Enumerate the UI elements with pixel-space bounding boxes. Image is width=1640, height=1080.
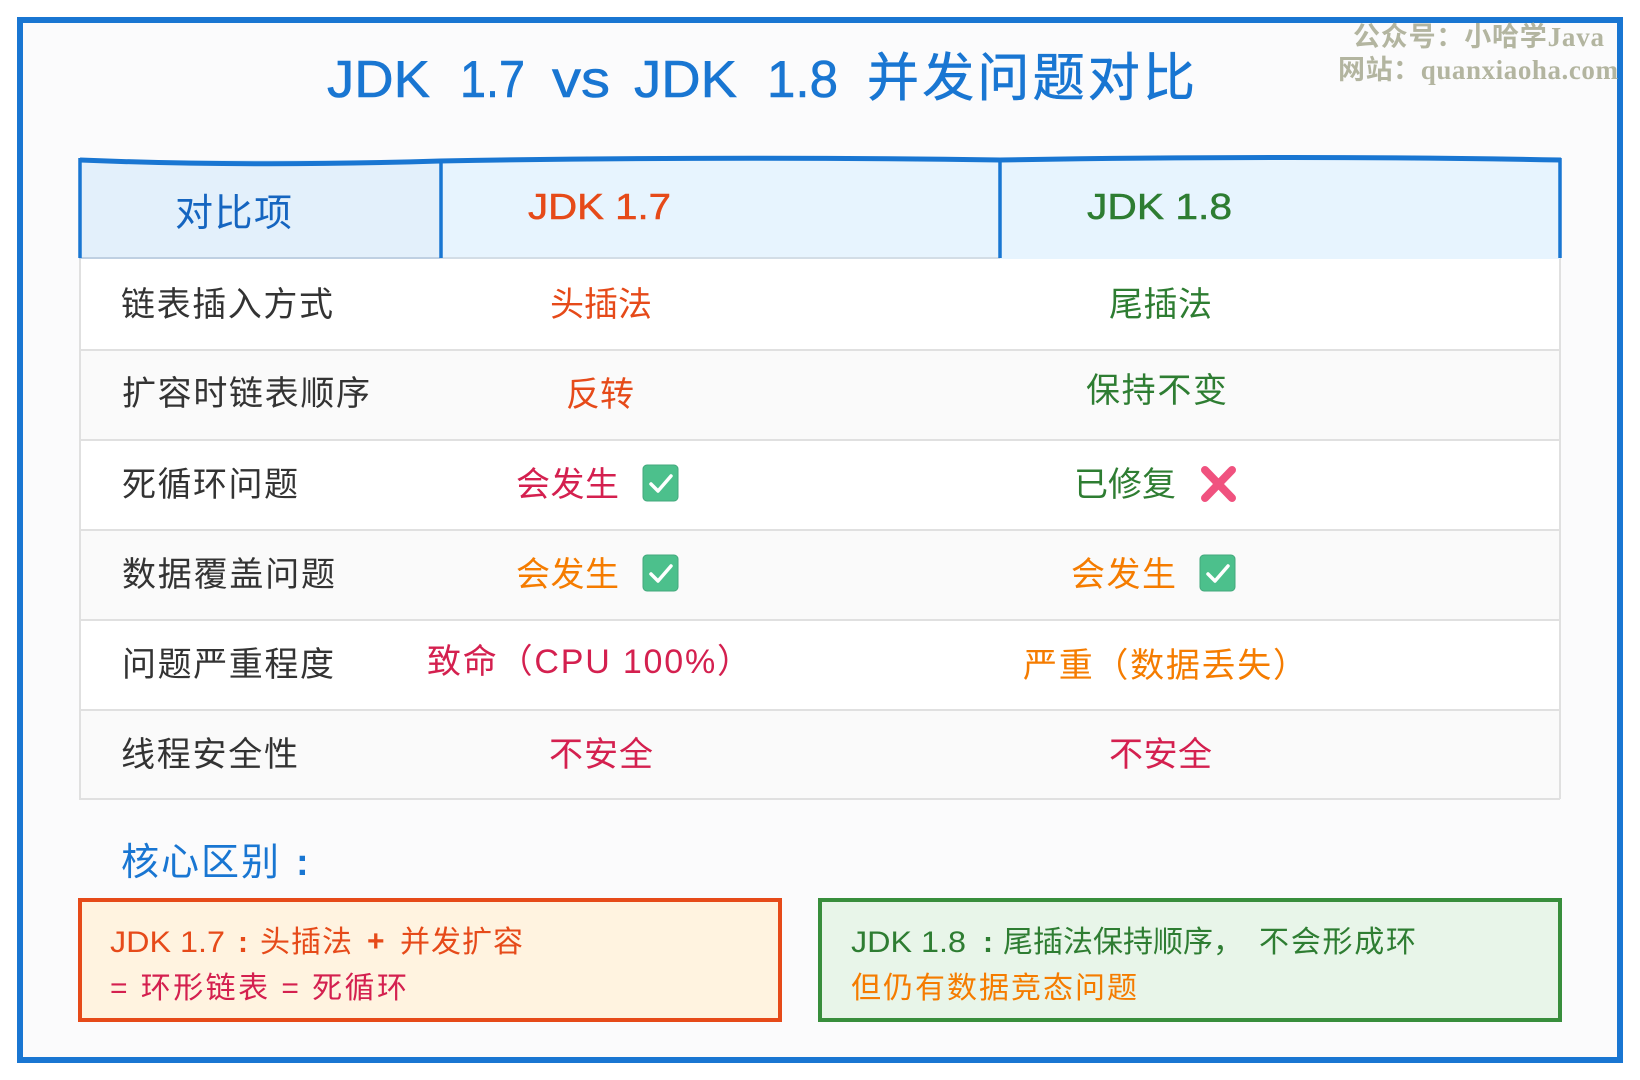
row: 链表插入方式: 链表插入方式 [121, 286, 333, 324]
row: 扩容时链表顺序: 扩容时链表顺序 [122, 375, 370, 413]
row: 问题严重程度: 问题严重程度 [122, 646, 334, 684]
row: 线程安全性: 线程安全性 [121, 736, 298, 774]
title: 并发问题对比 [867, 50, 1195, 108]
watermark: 网站：quanxiaoha.com [1338, 55, 1618, 85]
title: vs [552, 51, 610, 109]
title [327, 50, 1195, 109]
icon: check [643, 555, 678, 591]
row: 链表插入方式: 头插法 [550, 286, 652, 324]
panel: JDK 1.8 callout: 尾插法保持顺序， [1003, 926, 1243, 959]
row: 数据覆盖问题: 会发生 [516, 556, 619, 594]
row: 死循环问题: 已修复 [1074, 466, 1176, 504]
row: 线程安全性: 不安全 [549, 736, 653, 774]
panel: JDK 1.7 callout: : [238, 926, 248, 959]
title: JDK [327, 51, 430, 109]
row: 链表插入方式 [121, 286, 1212, 324]
heading: 核心区别: 核心区别 [121, 842, 279, 884]
row: 死循环问题 [122, 465, 1232, 504]
table header: 对比项 [175, 193, 292, 235]
panel: JDK 1.8 callout: : [983, 926, 993, 959]
row: 扩容时链表顺序: 反转 [566, 376, 634, 414]
watermark [1338, 22, 1618, 85]
row: 链表插入方式: 尾插法 [1109, 286, 1212, 324]
row: 扩容时链表顺序: 保持不变 [1086, 372, 1227, 410]
panel: JDK 1.7 callout: = 环形链表 = 死循环 [110, 972, 407, 1005]
panel: JDK 1.8 callout: 不会形成环 [1259, 926, 1416, 959]
panel: JDK 1.7 callout: JDK 1.7 [110, 926, 225, 959]
table rows background [79, 258, 1560, 799]
heading: 核心区别: : [296, 842, 309, 884]
table header: JDK 1.7 [528, 186, 671, 227]
row: 死循环问题: 死循环问题 [122, 466, 298, 504]
row: 数据覆盖问题 [122, 555, 1235, 594]
table header: JDK 1.8 [1087, 186, 1232, 227]
row: 线程安全性 [121, 736, 1212, 774]
panel: JDK 1.7 callout: 并发扩容 [400, 926, 523, 959]
panel: JDK 1.7 callout: + [367, 925, 385, 958]
panel: JDK 1.8 callout [820, 900, 1560, 1020]
row: 数据覆盖问题: 会发生 [1071, 556, 1176, 594]
panel: JDK 1.7 callout [80, 900, 780, 1020]
icon: check [643, 465, 678, 501]
comparison table [79, 158, 1561, 799]
watermark: 公众号：小哈学Java [1353, 22, 1604, 52]
row: 扩容时链表顺序 [122, 372, 1227, 414]
panel: JDK 1.8 callout: JDK 1.8 [851, 926, 966, 959]
row: 问题严重程度 [122, 643, 1307, 685]
panel: JDK 1.8 callout: 但仍有数据竞态问题 [851, 972, 1137, 1005]
panel: JDK 1.7 callout: 头插法 [260, 926, 352, 959]
row: 问题严重程度: 严重（数据丢失） [1023, 647, 1307, 685]
title: JDK [634, 51, 737, 109]
icon: check [1200, 555, 1235, 591]
row: 死循环问题: 会发生 [516, 466, 619, 504]
row: 数据覆盖问题: 数据覆盖问题 [122, 556, 335, 594]
title: 1.8 [767, 51, 838, 109]
table header [79, 158, 1561, 259]
row: 线程安全性: 不安全 [1109, 736, 1212, 774]
title: 1.7 [460, 51, 525, 109]
row: 问题严重程度: 致命（CPU 100%） [427, 643, 751, 681]
icon: cross [1205, 470, 1232, 498]
